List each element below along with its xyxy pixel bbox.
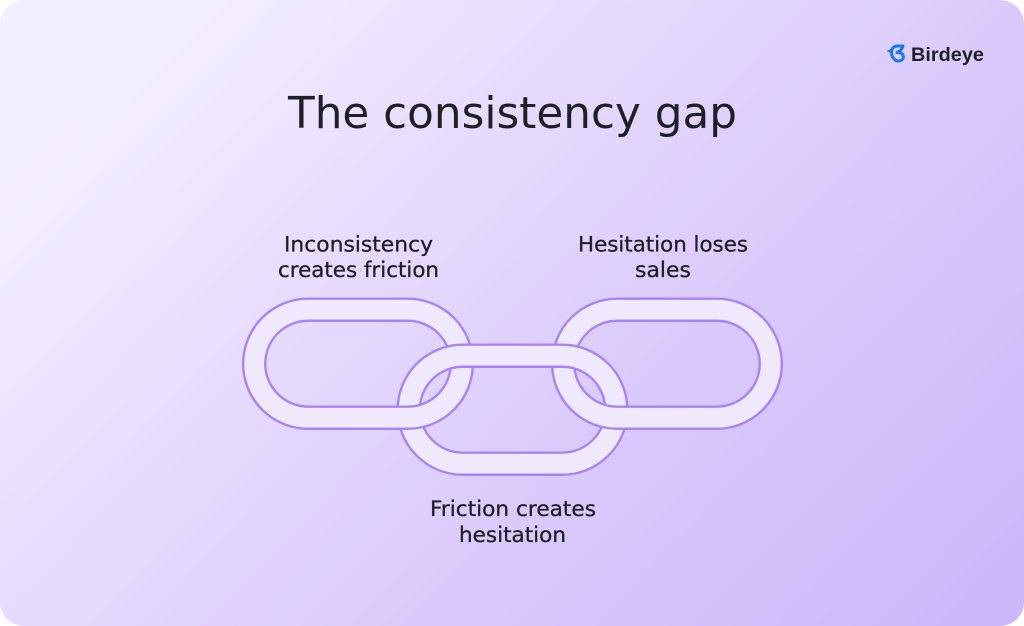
left link lower overlap — [246, 386, 470, 430]
label: friction creates hesitation — [430, 497, 596, 547]
wordmark: Birdeye — [911, 44, 984, 66]
chain link: middle — [409, 356, 616, 464]
chain link: left — [254, 310, 462, 418]
label: hesitation loses sales: Hesitation loses — [578, 232, 748, 256]
label: friction creates hesitation: hesitation — [459, 523, 566, 547]
logo: Birdeye — [886, 44, 984, 66]
chain link: right — [563, 310, 771, 418]
label: hesitation loses sales: sales — [635, 258, 691, 282]
label: friction creates hesitation: Friction creates — [430, 497, 596, 521]
label: inconsistency creates friction: Inconsistency — [284, 232, 433, 256]
chain graphic — [254, 310, 771, 464]
right link lower overlap — [554, 386, 779, 430]
label: inconsistency creates friction — [278, 232, 439, 282]
label: inconsistency creates friction: creates friction — [278, 258, 439, 282]
icon: bird — [886, 46, 903, 61]
label: hesitation loses sales — [578, 232, 748, 282]
title: The consistency gap — [287, 89, 737, 139]
